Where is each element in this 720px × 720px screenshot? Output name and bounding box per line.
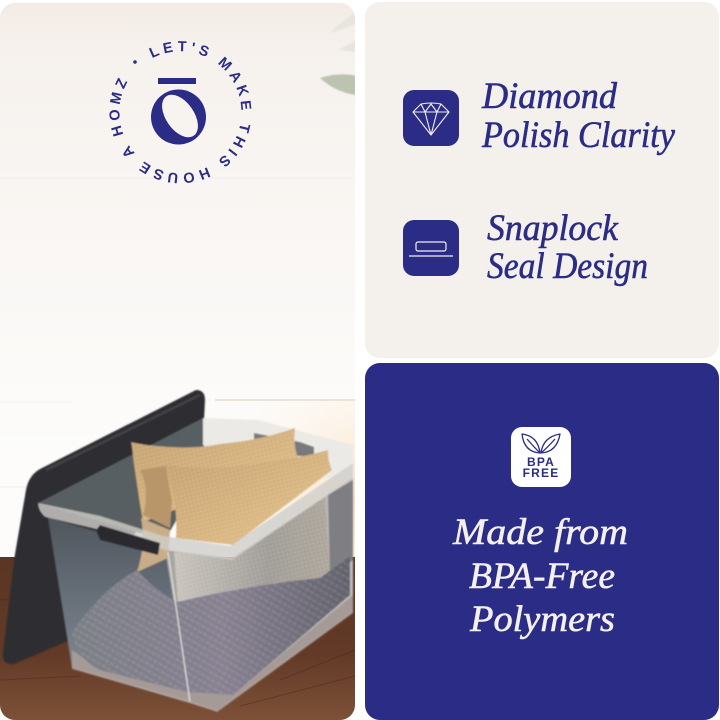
icon: diamond	[403, 90, 459, 146]
box interior	[38, 418, 205, 540]
icon: snaplock seal	[403, 220, 459, 276]
icon: BPA free badge: BPA	[527, 455, 555, 469]
heading: snaplock seal design: Seal Design	[487, 246, 648, 287]
blanket	[72, 556, 350, 695]
heading: snaplock seal design	[487, 208, 648, 287]
box floor strip	[72, 595, 353, 711]
left front panel	[48, 518, 174, 667]
wooden floor	[0, 557, 355, 720]
heading: diamond polish clarity: Polish Clarity	[481, 115, 676, 156]
right front panel	[165, 478, 353, 711]
storage box	[38, 418, 353, 711]
circular slogan: LET'S MAKE THIS HOUSE A HOMZ	[109, 41, 252, 184]
heading: diamond polish clarity	[481, 76, 676, 156]
plant leaves	[320, 12, 356, 95]
text: made from BPA-free polymers	[452, 512, 628, 640]
pillows	[131, 428, 332, 602]
box latch	[96, 525, 160, 555]
logo mark: o with macron	[151, 78, 206, 144]
icon: BPA free badge	[511, 427, 571, 487]
panel: features	[365, 2, 719, 358]
text: made from BPA-free polymers: Made from	[452, 512, 628, 553]
icon: BPA free badge: FREE	[523, 466, 559, 480]
heading: snaplock seal design: Snaplock	[487, 208, 619, 249]
wall moulding lines	[0, 399, 355, 488]
transparent back rim	[203, 418, 353, 482]
storage lid	[3, 390, 205, 664]
text: made from BPA-free polymers: BPA-Free	[469, 556, 615, 597]
box rim and front edge	[38, 463, 353, 560]
panel: BPA free	[365, 363, 719, 720]
text: made from BPA-free polymers: Polymers	[469, 599, 615, 640]
heading: diamond polish clarity: Diamond	[481, 76, 617, 117]
logo: circular badge	[109, 41, 252, 184]
panel: product photo	[0, 3, 360, 720]
